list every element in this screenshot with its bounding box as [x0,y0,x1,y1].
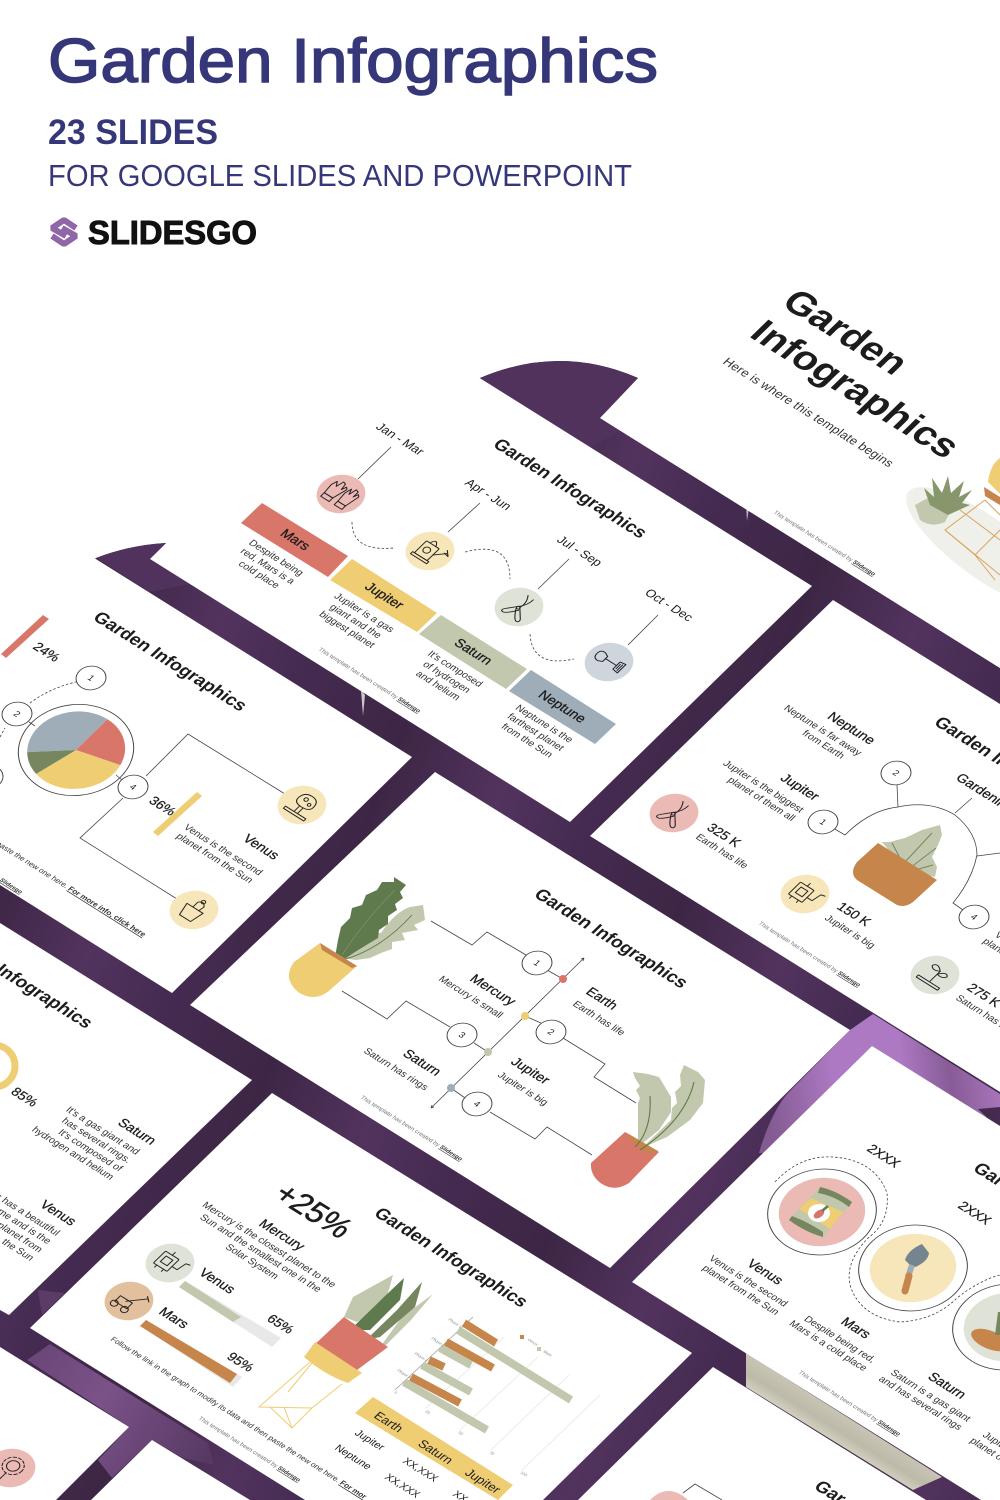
slide subtitle: Here is where this template begins [720,355,897,470]
footer credit: This template has been created by Slidesgo [197,1416,301,1483]
table header labels: Saturn [415,1437,456,1467]
panel: fishbone slide [190,772,850,1268]
number circle 1: 1 [531,958,543,968]
panel: timeline circles slide [632,1046,1000,1500]
logo wordmark: SLIDESGO [88,214,257,251]
date label: Jan - Mar [373,420,427,458]
label: Earth: Earth [583,985,621,1012]
label: Mars: Mars [838,1315,874,1341]
label: Mars: Mars [156,1305,192,1331]
bar chart: Venus [526,1337,539,1347]
pie chart [0,686,157,814]
description: Earth: Earth has life [570,999,627,1038]
illustration: yellow pot plant [289,877,425,997]
bar: Jupiter: Jupiter [362,580,407,612]
bar chart: Phase 1 [447,1317,464,1329]
description: Jupiter: Jupiter is the biggest [720,759,806,815]
connector line [683,1484,722,1500]
panel: pie chart slide [0,499,412,993]
description: Neptune: from the Sun [498,722,555,760]
panel: bottom center slide [578,1367,926,1500]
progress bar: Venus [179,1281,281,1347]
description: Saturn: It's composed [425,649,485,689]
label: Neptune: Neptune [824,709,879,747]
percent label: 24% [30,640,63,664]
icon: watering can [396,524,464,578]
label: Saturn: Saturn [400,1047,444,1078]
footer credit: This template has been created by Slidesgo [359,1095,463,1162]
number circle 4: 4 [968,912,980,922]
icon: sprayer [136,1236,204,1290]
percent label: 65% [264,1312,297,1336]
stat: 325 K: 325 K [704,821,744,850]
table header labels: Jupiter [462,1466,504,1496]
icon: bonsai [268,778,336,832]
lilac highlight lower left [27,1344,214,1478]
description: Saturn: Saturn is a gas giant [888,1368,973,1424]
dashed path [775,1157,1000,1322]
description: Mercury: Solar System [223,1242,281,1282]
bar chart: Mars [542,1349,553,1357]
description: Saturn: has several rings. [59,1116,133,1165]
connector lines [29,722,285,899]
bar chart: Phase 2 [430,1336,447,1348]
number circle 1: 1 [85,673,97,683]
description: Mars: Despite being [246,538,306,578]
purple backdrop behind slides [0,361,1000,1500]
bar chart [393,1317,600,1478]
label: Venus: Venus [744,1257,787,1287]
table header [355,1397,513,1500]
dashed connectors [0,682,76,737]
connector lines [358,447,658,645]
branch lines [342,921,636,1155]
number circle 3 [0,760,9,794]
bar chart: Phase 3 [413,1351,430,1363]
description: Neptune: from Earth [799,729,847,761]
illustration: orange pot plant [853,825,942,906]
description: Jupiter: Jupiter is a gas [331,592,396,635]
panel: title slide [600,185,1000,668]
number circle 4 [953,900,995,934]
bar chart: 0 [393,1390,399,1395]
bar: Mars [241,503,348,577]
number circle 1 [516,946,558,980]
panel: stats and bar chart slide [30,1093,692,1500]
number circle 4 [112,770,154,804]
bar: Neptune [509,670,616,744]
subtitle: slide count: 23 SLIDES [48,113,218,152]
link text: Follow the link in the graph to modify its data and then paste the new one here. For mor [109,1335,369,1500]
number circle 2 [530,1015,572,1049]
shaded fold [38,1290,65,1315]
main title: Garden Infographics [48,27,658,96]
percent label: 36% [146,794,179,818]
description: Saturn: and helium [413,669,462,703]
percent bar salmon [1,615,49,658]
description: Mercury: Mercury is the closest planet to the [200,1200,338,1290]
number circle 2 [875,756,917,790]
description: Saturn: hydrogen and helium [29,1125,116,1182]
table rows: Neptune [332,1443,373,1472]
description: Mars: cold place [236,559,282,591]
sliver 2 [361,690,365,716]
slide title: Garden Infographics [89,608,252,715]
number circle 4: 4 [471,1099,483,1109]
percent label: 95% [224,1350,257,1374]
description: Neptune: Neptune is far away [781,704,864,758]
table rows: XX,XXX [400,1456,440,1484]
label: Jupiter: Jupiter [777,771,823,803]
ring: Venus seed packet [745,1152,899,1272]
table rows: XX,XXX [382,1472,422,1500]
illustration: red pot plant [591,1065,705,1188]
year label: 2XXX [864,1142,904,1170]
bar: Mars: Mars [277,526,314,553]
label: Venus: Venus [240,832,283,862]
bar chart: 75 [488,1450,496,1456]
ring: Saturn [930,1267,1000,1387]
slide title: Garden [774,282,917,382]
table rows [332,1428,470,1500]
icon: potted plant [160,883,228,937]
description: Mercury: Sun and the smallest one in the [197,1213,324,1295]
panel: Saturn percent slide [0,923,252,1315]
icon: sprout [901,948,969,1002]
bar chart: Phase 4 [396,1368,413,1380]
number circle 2 [0,697,38,731]
number circle 2: 2 [11,709,23,719]
description: Venus: Venus is the second [706,1254,790,1309]
lower arc tab [96,543,190,592]
bar chart: 50 [457,1430,465,1436]
label: Jupiter: Jupiter [508,1055,554,1087]
description: Earth has life [693,832,750,871]
arc diagram [833,785,1000,910]
axis dots [447,975,567,1092]
number circle 4 [456,1087,498,1121]
label: Saturn: Saturn [115,1116,159,1147]
logo icon [52,220,76,244]
description: Jupiter: giant and the [327,602,384,641]
year label: 2XXX [955,1199,995,1227]
subtitle: platforms: FOR GOOGLE SLIDES AND POWERPOINT [48,158,632,193]
table rows: Jupiter [352,1428,387,1453]
number circle 1: 1 [817,817,829,827]
beige page curl [746,1353,942,1490]
number circle 3 [441,1018,483,1052]
icon: sprayer [771,867,839,921]
description: Venus: the Sun [0,1237,36,1263]
number circle 4: 4 [127,782,139,792]
description: Venus: Venus is the second [181,823,265,878]
bar: Jupiter [330,559,437,632]
percent label: 85% [8,1085,41,1109]
big stat: +25% [267,1177,361,1244]
slide title: Garden Infographics [530,885,693,992]
icon: shovel [575,635,643,689]
lilac highlight band [759,1014,1000,1153]
description: Mercury: Mercury is small [436,974,505,1020]
stat: 150 K: 150 K [834,900,874,929]
description: Jupiter: planet of them all [725,775,797,823]
sliver 1 [746,505,749,521]
description: Mars: Despite being red, [801,1314,878,1365]
label: Venus: Venus [37,1198,80,1228]
description: Mars: Mars is a cold place [787,1319,870,1374]
description: Saturn: Saturn has rings [361,1046,430,1093]
date label: Jul - Sep [554,533,605,569]
number circle 3: 3 [456,1030,468,1040]
bar: Saturn [419,615,527,689]
description: Neptune: farthest planet [504,712,566,753]
illustration: garden plants [891,458,1000,628]
panel: bottom left slide [0,1347,129,1500]
description: Saturn: of hydrogen [420,660,472,695]
date label: Apr - Jun [462,476,515,513]
footer credit: This template has been created by Slidesgo [772,510,876,577]
illustration: plant on stand [259,1275,433,1428]
table header labels: Earth [371,1409,406,1435]
description: Venus: planet from the Sun [699,1264,781,1317]
description: Neptune: Neptune is the [513,703,575,745]
number circle 1 [802,805,844,839]
description: Jupiter is big [822,913,877,951]
yellow ring segment [0,1045,15,1087]
axis line [431,958,584,1108]
bar: Saturn: Saturn [451,636,496,668]
panel: timeline slide [150,325,812,822]
label: Mercury: Mercury [467,972,519,1008]
footer credit: This template has been created by Slidesgo [797,1370,901,1437]
footer credit: This template has been created by Slidesgo [757,921,861,988]
label: Venus: Venus [196,1266,239,1296]
panel: semicircle diagram slide [590,600,1000,1092]
ring: Mars trowel [836,1208,990,1328]
description: Venus: planet from the Sun [173,832,255,886]
number circle 2: 2 [545,1027,557,1037]
panel: bottom middle slide [91,1440,250,1500]
number circle 1 [70,661,112,695]
bar: Neptune: Neptune [535,688,589,726]
dashed arrows [352,522,574,661]
description: Saturn: It's a gas giant and [63,1105,142,1157]
slide title: Garden Infographics [489,435,652,542]
icon: shears [640,786,708,840]
percent bar yellow [153,792,202,836]
progress bar: Mars [140,1320,242,1387]
number circle 2: 2 [890,768,902,778]
icon: lawn mower [95,1274,163,1328]
footer credit: This template has been created by Slidesgo [317,647,421,714]
description: Jupiter: Jupiter is big [495,1070,550,1108]
upper arc tab [480,361,638,448]
label: Mercury: Mercury [256,1217,308,1253]
label: Saturn: Saturn [925,1370,969,1401]
slide title: Garden Infographics [370,1204,533,1311]
date label: Oct - Dec [642,586,696,624]
icon: gloves [307,467,375,521]
bar chart: 100 [519,1470,529,1478]
slide title: Infographics [742,313,969,465]
description: Saturn: and has several rings [876,1374,964,1432]
description: Jupiter: biggest planet [316,610,377,650]
bar chart: 25 [424,1409,432,1415]
icon: shears [485,580,553,634]
icon: flower [0,1441,45,1495]
pink icon circle [650,1491,688,1500]
table header labels [371,1409,504,1496]
description: Mars: red, Mars is a [238,547,297,587]
description: Saturn: It's composed of [55,1128,125,1174]
